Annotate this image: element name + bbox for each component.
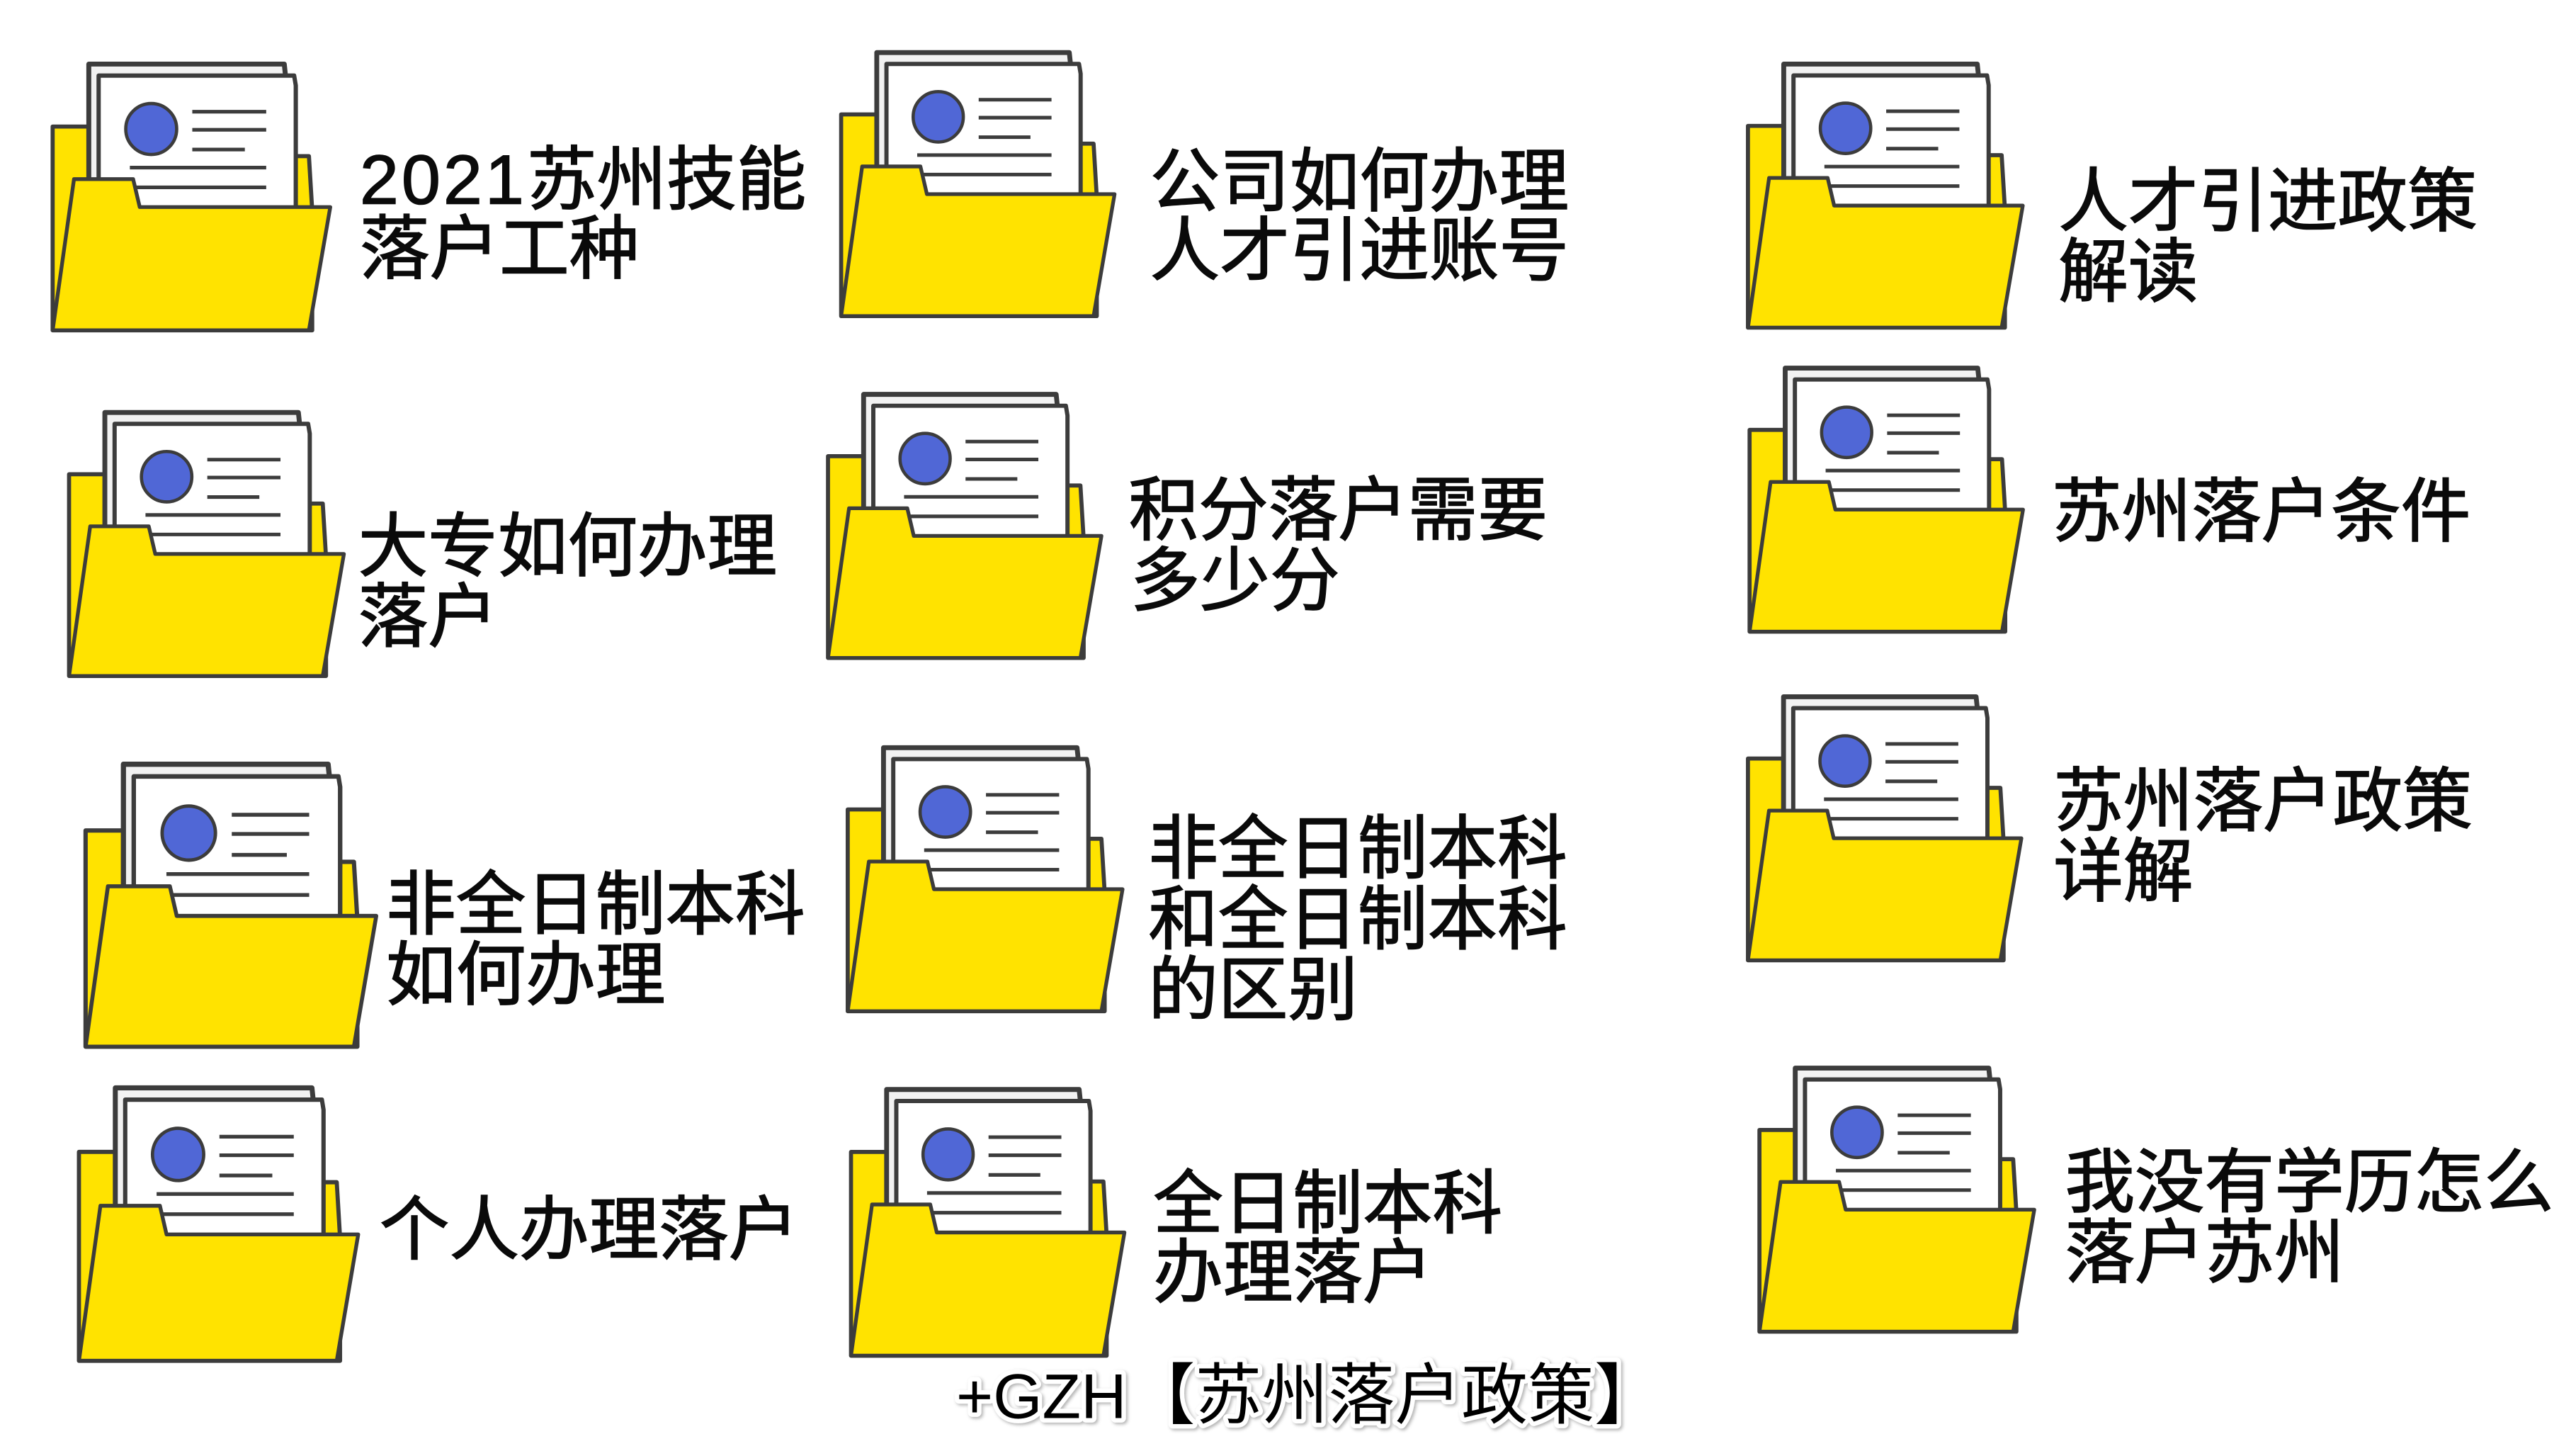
item: 2021苏州技能落户工种	[52, 64, 806, 330]
text: 2021苏州技能落户工种: 2021苏州技能	[360, 141, 806, 219]
text: 苏州落户条件: 苏州落户条件	[2052, 473, 2470, 551]
icon: folder	[86, 764, 376, 1046]
item: 非全日制本科和全日制本科的区别	[848, 747, 1567, 1029]
icon: folder	[69, 412, 344, 676]
text: 2021苏州技能落户工种: 落户工种	[360, 210, 639, 288]
icon: folder	[851, 1090, 1125, 1355]
text: 个人办理落户: 个人办理落户	[380, 1191, 798, 1269]
text: 我没有学历怎么落户苏州: 落户苏州	[2065, 1214, 2344, 1292]
icon: folder	[1749, 368, 2023, 631]
footer caption: +GZH	[956, 1361, 1127, 1432]
item: 全日制本科办理落户	[851, 1090, 1502, 1355]
item: 大专如何办理落户	[69, 412, 777, 676]
text: 公司如何办理人才引进账号: 人才引进账号	[1150, 211, 1569, 289]
text: 积分落户需要多少分: 多少分	[1130, 542, 1340, 620]
icon: folder	[52, 64, 330, 330]
text: 全日制本科办理落户: 办理落户	[1153, 1233, 1433, 1311]
item: 公司如何办理人才引进账号	[841, 52, 1569, 316]
footer caption: 【苏州落户政策】	[1129, 1358, 1661, 1433]
item: 个人办理落户	[79, 1088, 798, 1361]
icon: folder	[828, 395, 1101, 658]
text: 大专如何办理落户: 大专如何办理	[358, 507, 777, 585]
item: 苏州落户政策详解	[1748, 696, 2473, 960]
item: 非全日制本科如何办理	[86, 764, 805, 1046]
icon: folder	[841, 52, 1115, 316]
text: 我没有学历怎么落户苏州: 我没有学历怎么	[2065, 1143, 2553, 1221]
icon: folder	[79, 1088, 358, 1361]
item: 苏州落户条件	[1749, 368, 2470, 631]
item: 我没有学历怎么落户苏州	[1759, 1068, 2553, 1332]
icon: folder	[1759, 1068, 2034, 1332]
text: 公司如何办理人才引进账号: 公司如何办理	[1150, 142, 1569, 220]
text: 苏州落户政策详解: 苏州落户政策	[2053, 762, 2473, 840]
item: 人才引进政策解读	[1748, 64, 2478, 327]
text: 非全日制本科和全日制本科的区别: 和全日制本科	[1148, 880, 1567, 958]
text: 苏州落户政策详解: 详解	[2053, 832, 2193, 910]
icon: folder	[1748, 64, 2023, 327]
text: 非全日制本科如何办理: 非全日制本科	[386, 865, 805, 943]
icon: folder	[1748, 696, 2021, 960]
item: 积分落户需要多少分	[828, 395, 1548, 658]
text: 人才引进政策解读: 人才引进政策	[2058, 162, 2478, 240]
text: 非全日制本科如何办理: 如何办理	[386, 936, 665, 1014]
text: 全日制本科办理落户: 全日制本科	[1153, 1165, 1502, 1243]
text: 人才引进政策解读: 解读	[2058, 232, 2198, 310]
icon: folder	[848, 747, 1123, 1011]
text: 积分落户需要多少分: 积分落户需要	[1129, 471, 1548, 549]
text: 非全日制本科和全日制本科的区别: 的区别	[1148, 951, 1358, 1029]
text: 非全日制本科和全日制本科的区别: 非全日制本科	[1148, 810, 1567, 888]
text: 大专如何办理落户: 落户	[358, 578, 498, 656]
